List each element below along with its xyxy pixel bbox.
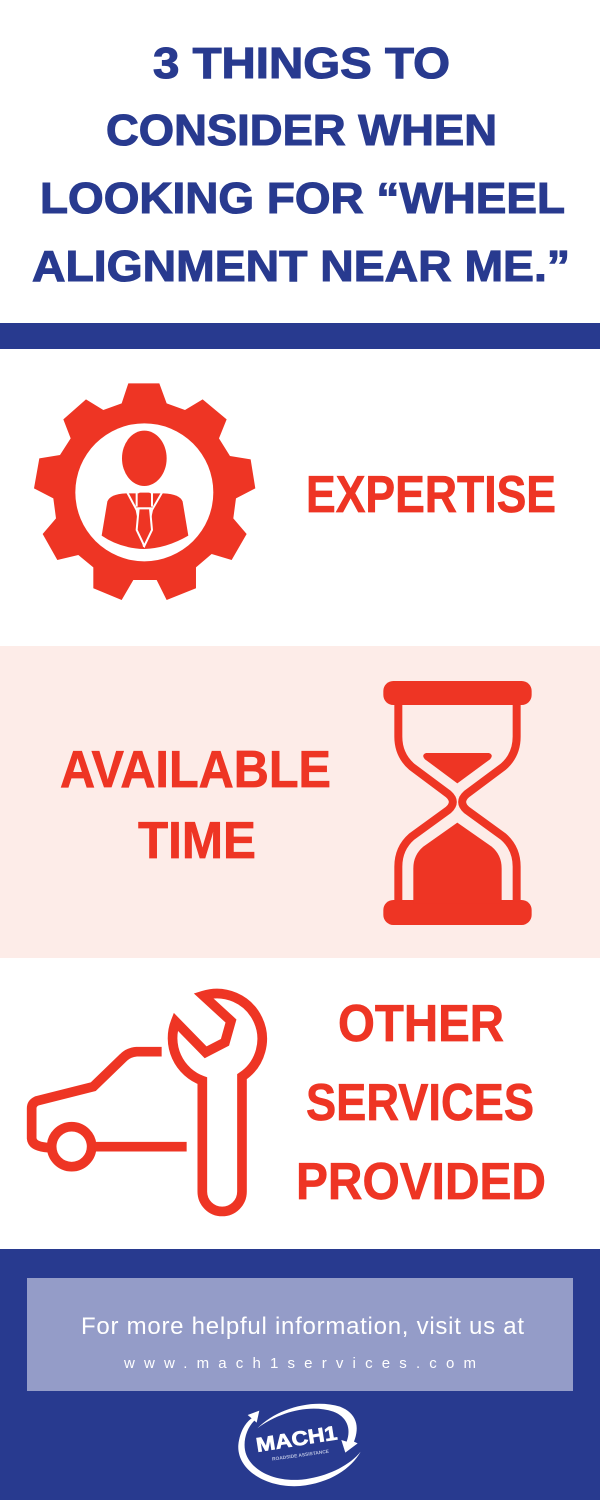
panel: other services xyxy=(32,994,546,1211)
header divider bar xyxy=(0,323,600,349)
title: 3 THINGS TO xyxy=(153,39,450,88)
title: CONSIDER WHEN xyxy=(106,106,497,155)
title xyxy=(32,39,570,291)
panel background xyxy=(0,646,600,958)
label: other services provided: OTHER xyxy=(338,995,504,1053)
label: other services provided: PROVIDED xyxy=(296,1153,546,1211)
callout: more information: www.mach1services.com xyxy=(123,1355,476,1372)
panel: expertise xyxy=(34,383,556,600)
label: available time: AVAILABLE xyxy=(60,741,331,799)
logo: Mach1: ROADSIDE ASSISTANCE xyxy=(272,1449,329,1462)
label: available time: TIME xyxy=(138,812,256,870)
label: other services provided xyxy=(296,995,546,1211)
logo: Mach1: MACH1 xyxy=(255,1422,339,1457)
label: available time xyxy=(60,741,331,870)
footer panel xyxy=(0,1249,600,1500)
title: LOOKING FOR “WHEEL xyxy=(40,174,565,223)
label: expertise: EXPERTISE xyxy=(306,466,556,524)
icon: hourglass xyxy=(383,681,532,925)
panel: available time xyxy=(0,646,600,958)
icon: gear with person xyxy=(34,383,255,600)
callout: more information: For more helpful information, visit us at xyxy=(81,1313,524,1340)
icon: car and wrench xyxy=(32,994,262,1211)
title: ALIGNMENT NEAR ME.” xyxy=(32,242,570,291)
label: other services provided: SERVICES xyxy=(306,1074,534,1132)
callout: more information xyxy=(27,1278,573,1391)
logo: Mach1 xyxy=(238,1404,361,1486)
